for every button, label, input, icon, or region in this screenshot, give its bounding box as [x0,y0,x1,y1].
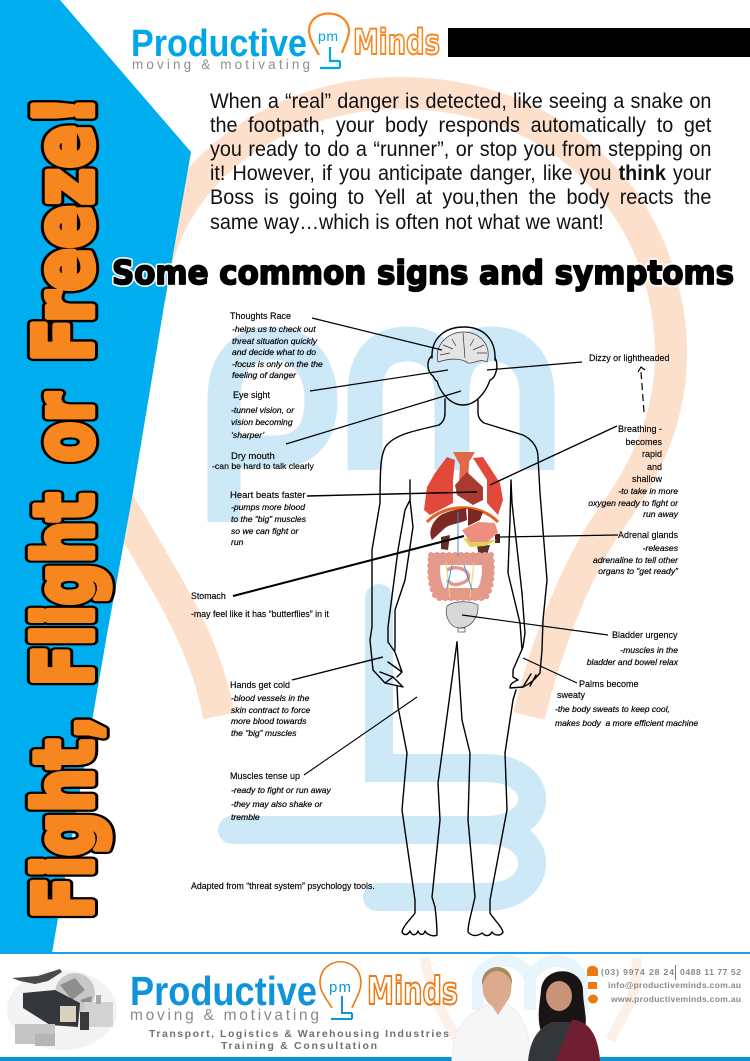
lungs [424,457,455,515]
note: hands: the “big” muscles [231,728,296,738]
note: muscles: -ready to fight or run away [231,785,331,795]
label: sweaty: sweaty [557,690,585,700]
top logo: moving & motivating [132,57,310,72]
rotated title: Freeze! [18,96,111,362]
label: stomach: Stomach [191,591,226,601]
pointer lines [233,318,618,775]
blue side panel [0,0,191,953]
footer [0,952,750,1061]
kidneys [441,535,450,550]
note: adrenal: -releases [643,543,678,553]
label: adrenal: Adrenal glands [618,530,678,540]
footer contact details: www.productiveminds.com.au [610,994,741,1004]
watermark: light bulb outline [100,93,671,716]
right leg and foot [457,642,516,936]
rotated title: Flight [18,493,111,686]
heart [455,472,483,505]
label: breathing: Breathing - [618,424,662,434]
note: adrenal: organs to “get ready” [598,566,678,576]
note: hands: -blood vessels in the [231,693,309,703]
intro paragraph: the footpath, your body responds automatically to get [210,113,711,137]
rotated title [18,96,111,919]
footer tagline [149,1028,449,1052]
footer tagline: Transport, Logistics & Warehousing Industries [149,1028,449,1040]
label: bladder: Bladder urgency [612,630,678,640]
rotated title: Fight, [18,716,111,919]
windpipe [453,452,475,482]
label: breathing: and [647,462,662,472]
note: heart: run [231,537,243,547]
footer top rule [0,952,750,954]
note: adrenal [593,543,678,576]
bladder [446,602,478,628]
footer portraits [452,967,600,1061]
left torso edge [395,500,413,650]
note: palms: -the body sweats to keep cool, [555,704,670,714]
intestines [434,559,488,594]
note: breathing [588,486,679,519]
intro paragraph: When a “real” danger is detected, like seeing a snake on [210,89,711,113]
note: dry mouth: -can be hard to talk clearly [212,461,314,471]
footer watermark [425,958,637,1056]
note: eye sight: ‘sharper’ [231,430,264,440]
note: heart [231,502,306,547]
organs [424,332,503,632]
intro paragraph: Boss is going to Yell at you,then the body reacts the [210,185,711,209]
note: thoughts race: -focus is only on the the [232,359,323,369]
note: breathing: run away [643,509,678,519]
label: breathing: becomes [625,437,662,447]
note: heart: so we can fight or [231,526,298,536]
top logo: Minds [353,23,440,63]
note: stomach: -may feel like it has “butterflies” in it [191,609,329,619]
note: muscles [231,785,332,822]
footer logo: moving & motivating [130,1007,319,1024]
label: palms: Palms become [579,679,639,689]
footer icon: freight collage [7,969,117,1050]
note: palms: makes body a more efficient machine [555,718,698,728]
diaphragm [427,508,498,522]
label: eye sight: Eye sight [233,390,270,400]
intro paragraph [210,89,712,234]
note: bladder: bladder and bowel relax [587,657,678,667]
note: breathing: -to take in more [618,486,678,496]
note: thoughts race: threat situation quickly [232,336,317,346]
note: bladder [586,645,678,667]
footer logo [130,962,458,1024]
liver [430,508,467,540]
label: muscles: Muscles tense up [230,771,300,781]
note: heart: -pumps more blood [231,502,305,512]
note: hands: skin contract to force [231,704,310,714]
body figure outline [370,327,547,936]
label: dry mouth: Dry mouth [231,451,275,462]
note: hands [231,693,310,738]
footer logo: Minds [367,969,458,1013]
watermark: pm and underscore logo [224,343,537,897]
rotated title: Flight [18,493,111,686]
label: dizzy: Dizzy or lightheaded [589,353,669,363]
footer logo: Productive [130,968,317,1014]
rotated title: Fight, [18,716,111,919]
label: breathing: rapid [642,449,662,459]
footer contact details: info@productiveminds.com.au [608,980,741,990]
note: bladder: -muscles in the [620,645,678,655]
note: hands: more blood towards [231,716,306,726]
top logo: Productive [131,23,307,65]
rotated title: or [18,393,111,462]
intro paragraph: same way…which is often not what we want! [210,210,604,234]
pancreas [463,538,497,547]
neck and left arm outer edge [370,399,445,687]
footer contact details: (03) 9974 28 24 [601,967,674,977]
note: thoughts race: feeling of danger [232,370,296,380]
dashed arrow to dizzy label [638,367,645,412]
note: eye sight: -tunnel vision, or [231,405,294,415]
label: breathing: shallow [632,474,662,484]
brain [437,332,488,363]
note: muscles: tremble [231,812,260,822]
footer tagline: Training & Consultation [221,1040,377,1052]
note: thoughts race: and decide what to do [232,347,316,357]
note: adrenal: adrenaline to tell other [593,555,678,565]
note: eye sight: vision becoming [231,417,293,427]
neck and right arm [478,399,547,688]
intro paragraph: it! However, if you anticipate danger, like you think your [210,161,711,185]
top logo: pm [318,28,338,44]
stomach [462,522,498,542]
left leg and foot [397,642,457,936]
note: thoughts race [232,324,323,380]
black header bar [448,28,750,57]
note: breathing: oxygen ready to fight or [588,498,678,508]
footer bottom band [0,1057,750,1061]
label: hands: Hands get cold [230,680,290,690]
label: thoughts race: Thoughts Race [230,311,291,321]
label: heart: Heart beats faster [230,490,306,501]
label: breathing [618,424,662,484]
note: thoughts race: -helps us to check out [232,324,316,334]
footer contact details [587,965,741,1004]
note: palms [555,704,698,728]
intro paragraph: you ready to do a “runner”, or stop you from stepping on [210,137,711,161]
rotated title: or [18,393,111,462]
footer logo: pm [329,979,351,996]
credit: Adapted from “threat system” psychology tools. [191,881,375,891]
left arm inner edge and thumb [388,480,410,677]
note: muscles: -they may also shake or [231,799,322,809]
rotated title: Freeze! [18,96,111,362]
footer contact details: 0488 11 77 52 [680,967,741,977]
note: eye sight [231,405,294,440]
head [432,327,495,360]
note: heart: to the “big” muscles [231,514,306,524]
top logo [131,14,440,72]
